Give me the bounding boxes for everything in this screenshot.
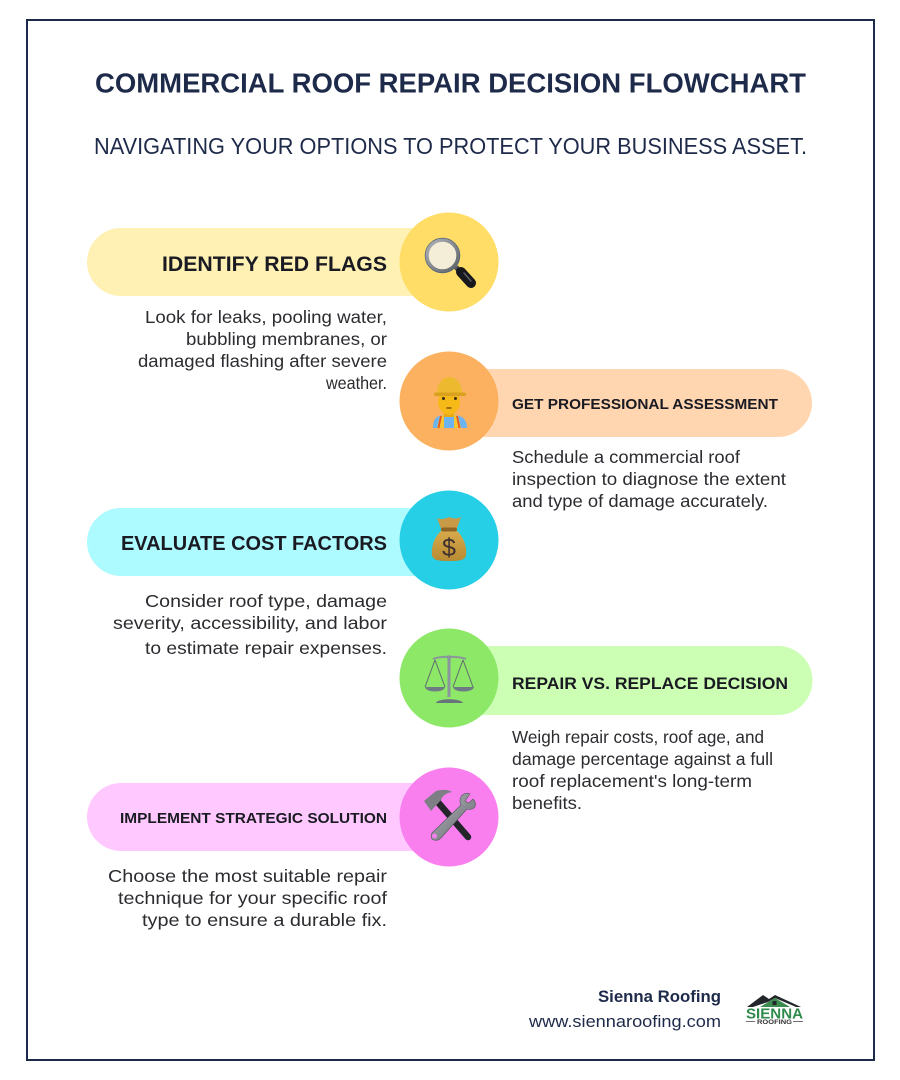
step 2 description	[512, 447, 786, 511]
step 5 banner	[87, 783, 440, 851]
step 4 heading: REPAIR VS. REPLACE DECISION	[512, 674, 788, 693]
step 3 description	[113, 591, 387, 658]
step 2 circle	[400, 352, 498, 450]
footer website: www.siennaroofing.com	[528, 1013, 721, 1031]
step 4 description: damage percentage against a full	[512, 749, 773, 769]
step 5 description: technique for your specific roof	[118, 888, 387, 908]
icon: balance scales	[425, 655, 474, 703]
step 4 description: benefits.	[512, 793, 582, 813]
step 3 circle	[400, 490, 498, 590]
step 2 description: inspection to diagnose the extent	[512, 469, 786, 489]
step 2 description: and type of damage accurately.	[512, 491, 768, 511]
icon: magnifying glass	[425, 238, 471, 283]
step 1 circle	[400, 212, 498, 312]
step 1 description: damaged flashing after severe	[138, 351, 387, 371]
step 2 banner	[460, 369, 812, 437]
step 1 description	[138, 307, 387, 393]
step 4 description	[512, 727, 773, 813]
step 2 description: Schedule a commercial roof	[512, 447, 740, 467]
subtitle: NAVIGATING YOUR OPTIONS TO PROTECT YOUR BUSINESS ASSET.	[94, 133, 807, 159]
step 2: get professional assessment	[400, 352, 812, 511]
step 5 description: type to ensure a durable fix.	[142, 910, 387, 930]
step 4 description: roof replacement's long-term	[512, 771, 752, 791]
icon: hammer and wrench	[424, 790, 475, 840]
icon: money bag: $	[442, 534, 456, 562]
step 1 banner	[87, 228, 440, 296]
step 4 description: Weigh repair costs, roof age, and	[512, 727, 764, 747]
step 5: implement strategic solution	[87, 768, 498, 930]
step 5 description: Choose the most suitable repair	[108, 866, 387, 886]
step 1 description: bubbling membranes, or	[186, 329, 387, 349]
step 3 heading: EVALUATE COST FACTORS	[121, 533, 387, 555]
step 3: evaluate cost factors	[87, 490, 498, 658]
step 3 description: severity, accessibility, and labor	[113, 613, 387, 633]
step 1 description: Look for leaks, pooling water,	[145, 307, 387, 327]
logo: Sienna Roofing: SIENNA	[746, 1006, 804, 1022]
step 1 heading: IDENTIFY RED FLAGS	[162, 253, 387, 276]
title: COMMERCIAL ROOF REPAIR DECISION FLOWCHART	[95, 68, 806, 98]
logo: Sienna Roofing	[746, 995, 804, 1026]
step 4 banner	[460, 646, 813, 715]
logo: Sienna Roofing: ROOFING	[757, 1020, 792, 1026]
step 5 description	[108, 866, 387, 930]
step 4 circle	[400, 628, 498, 728]
step 3 description: to estimate repair expenses.	[145, 638, 387, 658]
step 5 heading: IMPLEMENT STRATEGIC SOLUTION	[120, 810, 387, 827]
step 3 description: Consider roof type, damage	[145, 591, 387, 611]
step 5 circle	[400, 768, 498, 866]
step 1 description: weather.	[325, 373, 387, 393]
footer company name: Sienna Roofing	[598, 988, 721, 1006]
step 1: identify red flags	[87, 212, 499, 393]
step 4: repair vs. replace decision	[400, 628, 813, 813]
step 3 banner	[87, 508, 440, 576]
icon: money bag	[432, 517, 466, 562]
step 2 heading: GET PROFESSIONAL ASSESSMENT	[512, 396, 778, 413]
icon: construction worker	[433, 377, 467, 428]
